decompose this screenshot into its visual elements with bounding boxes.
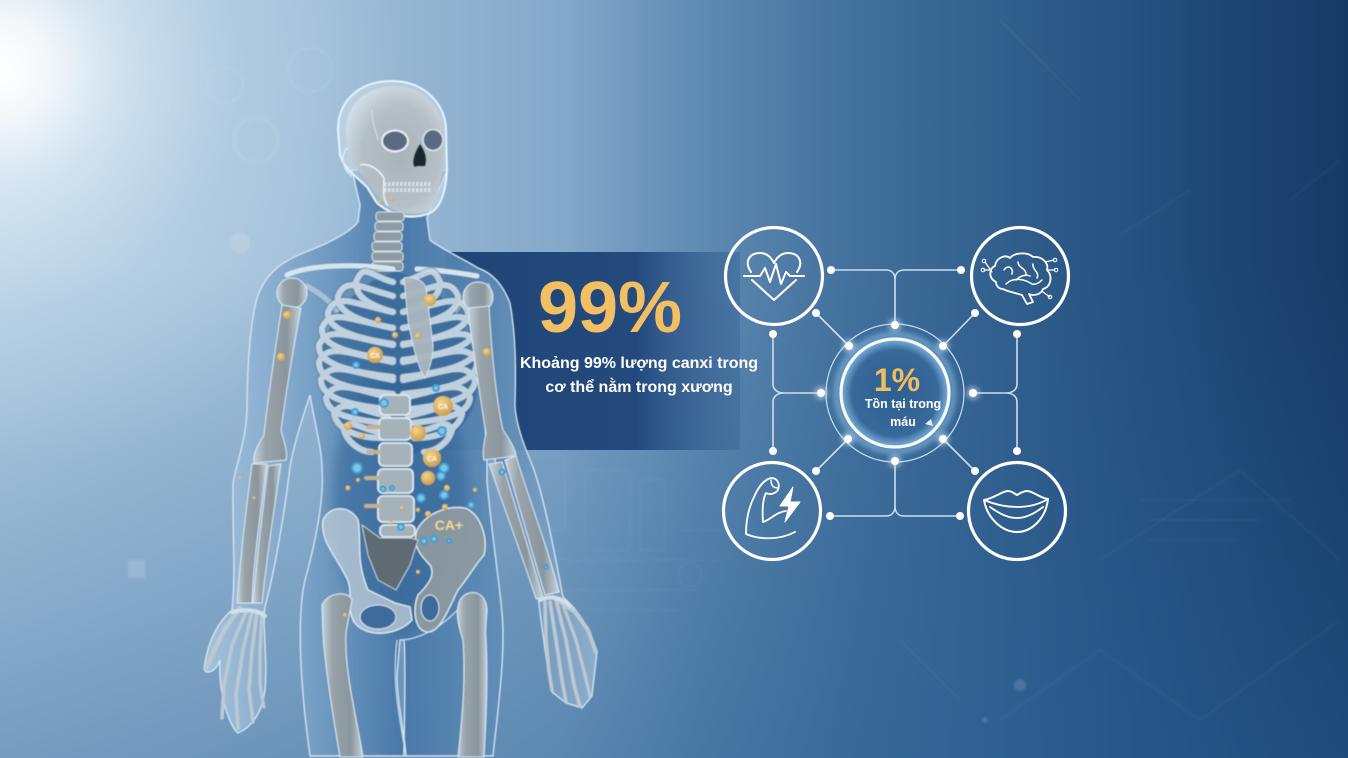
lumbar spine: [378, 395, 415, 537]
calcium particles: CA: [438, 404, 448, 411]
pelvis: [323, 507, 485, 633]
connector lines: [773, 270, 1017, 516]
shoulder blade bands: [305, 285, 490, 312]
text: 1% description: Tồn tại trong: [865, 397, 941, 411]
body silhouette: [204, 170, 597, 756]
human figure: translucent body with skeleton: [204, 81, 597, 757]
right arm bones: [463, 282, 559, 599]
text: 1%: 1%: [874, 362, 920, 398]
right hand: [540, 597, 596, 706]
head glass: [338, 81, 447, 217]
icon: brain: [972, 228, 1068, 324]
connector dots: [769, 266, 1021, 520]
label: CA+: CA+: [435, 517, 463, 533]
heading: 99%: 99%: [538, 268, 682, 348]
rib cage: [320, 272, 477, 455]
center hub: 1%: [826, 324, 964, 462]
femurs: [322, 593, 487, 757]
left arm bones: [237, 278, 307, 603]
icon: muscle: [724, 462, 820, 560]
text: 99% description: cơ thể nằm trong xương: [545, 377, 733, 396]
network diagram: [724, 228, 1068, 560]
cervical spine: [372, 212, 404, 271]
skull: [343, 86, 445, 214]
sternum: [404, 277, 433, 378]
panel: 99% callout background: [445, 252, 740, 450]
torso dark core: [332, 370, 468, 630]
calcium particles: [238, 197, 548, 617]
left hand: [206, 608, 265, 728]
icon: heart: [726, 228, 822, 324]
calcium particles: CA: [370, 353, 380, 360]
calcium particles: CA: [427, 456, 437, 463]
text: 1% description: máu: [890, 415, 916, 429]
leg inner line: [395, 605, 462, 756]
text: 99% description: Khoảng 99% lượng canxi trong: [520, 355, 758, 372]
icon: lips: [968, 462, 1066, 560]
clavicles: [287, 266, 477, 276]
